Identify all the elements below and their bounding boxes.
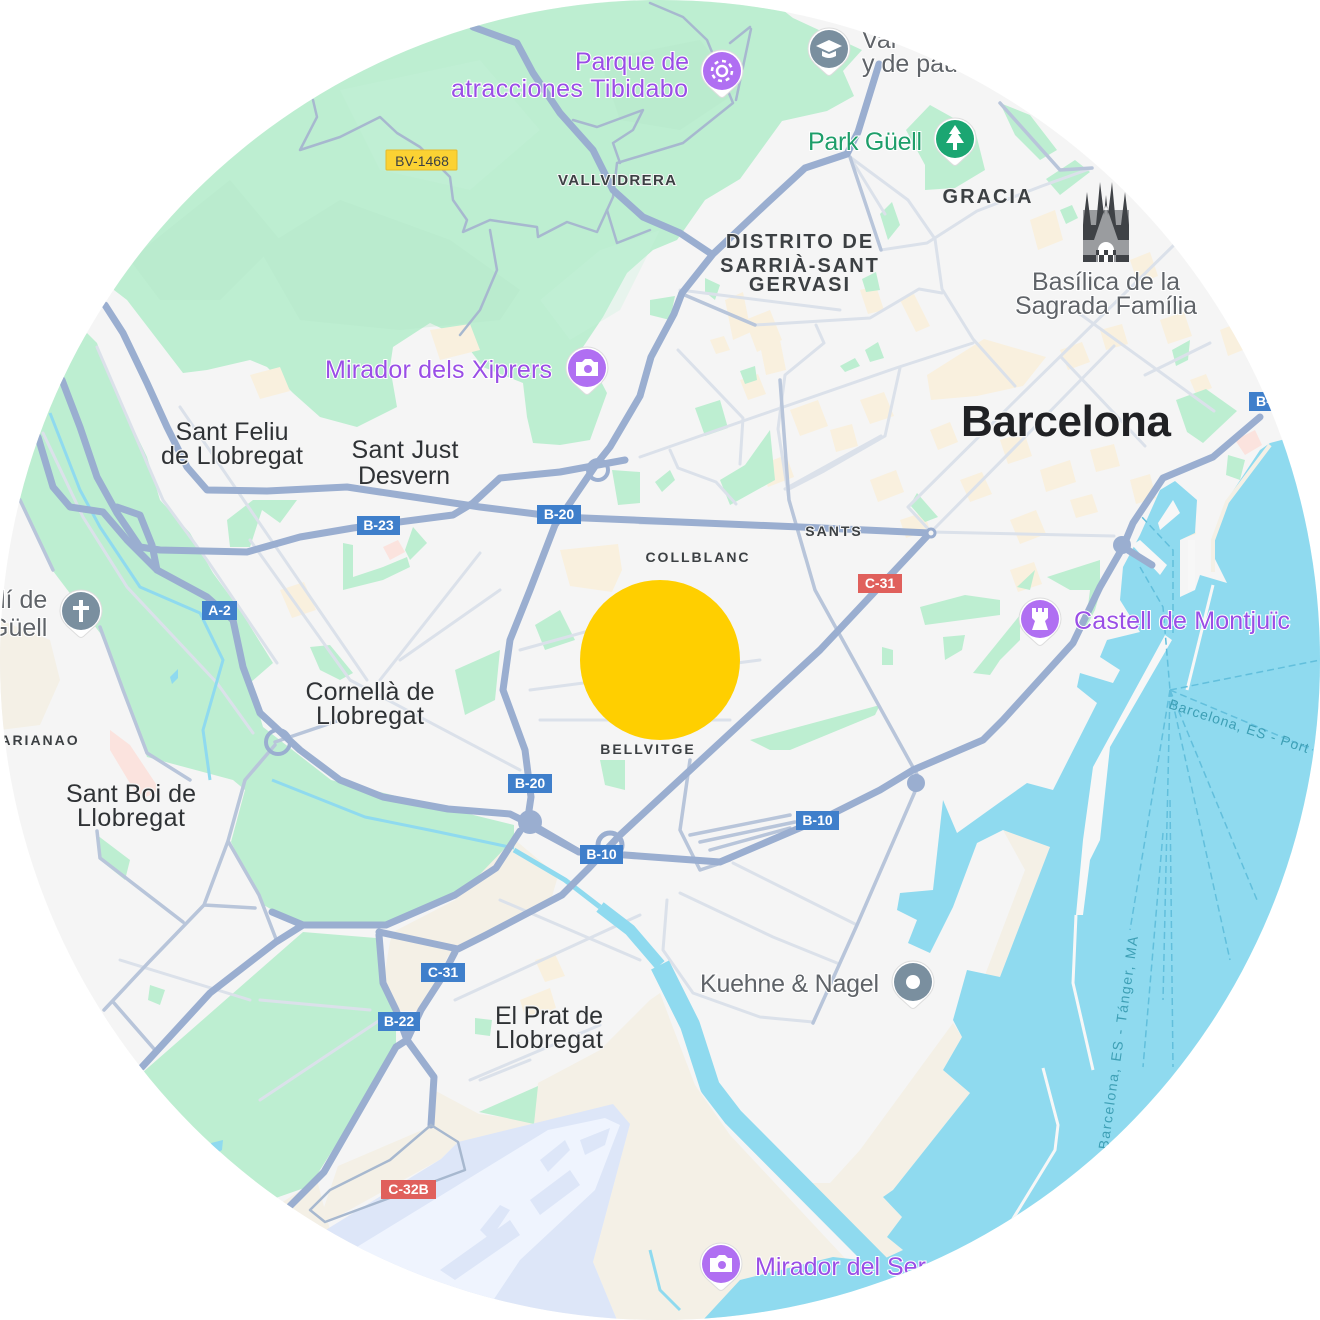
icon: Tibidabo pin	[701, 50, 743, 98]
text: district labels: BELLVITGE	[600, 741, 696, 757]
text: city labels: Sant Feliu	[176, 418, 288, 446]
text: city labels: Val	[862, 26, 896, 54]
icon: cross pin	[60, 590, 102, 638]
text: city labels: Kuehne & Nagel	[700, 970, 879, 998]
tan land areas	[0, 620, 1050, 1320]
icon: Castell de Montjuïc pin	[1019, 598, 1061, 646]
text: city labels: Barcelona	[961, 397, 1172, 446]
text: district labels: GERVASI	[749, 274, 851, 296]
text: district labels: COLLBLANC	[645, 549, 751, 565]
road shields: blue: B-20	[515, 775, 545, 791]
text: city labels: Llobregat	[77, 804, 185, 832]
icon: Kuehne & Nagel pin	[892, 961, 934, 1008]
text: points of interest: Park Güell	[808, 128, 922, 156]
text: district labels: ARIANAO	[0, 732, 80, 748]
sea	[703, 430, 1320, 1320]
Llobregat river and streams	[50, 413, 880, 1310]
text: city labels: de Llobregat	[161, 442, 303, 470]
text: sea route labels: Barcelona, ES - Tánger, MA	[1095, 935, 1141, 1150]
mountain local roads	[300, 3, 751, 335]
text: city labels: Sant Boi de	[66, 780, 196, 808]
road shields: blue: B-10	[586, 846, 617, 862]
text: city labels: Llobregat	[495, 1026, 603, 1054]
text: city labels: y de pau	[862, 50, 958, 78]
text: city labels: lí de	[0, 586, 47, 614]
harbour quays and ponds	[170, 445, 1270, 1240]
shipping lanes	[1130, 515, 1320, 1067]
text: points of interest: Parque de	[575, 48, 689, 76]
text: city labels: Llobregat	[316, 702, 424, 730]
text: points of interest	[325, 48, 1290, 1281]
green triangle by airport	[479, 1086, 538, 1124]
location marker: yellow circle	[580, 580, 740, 740]
road shields: red	[381, 574, 902, 1199]
road shields: blue: B-22	[384, 1013, 414, 1029]
road shields: red: C-31	[865, 575, 895, 591]
road shields: blue: C-31	[428, 964, 458, 980]
text: city labels: Sant Just	[352, 436, 459, 464]
road shields: blue: B-10	[802, 812, 833, 828]
minor streets	[43, 157, 1214, 1100]
text: city labels: El Prat de	[495, 1002, 603, 1030]
text: sea route labels: Barcelona, ES - Port	[1167, 696, 1311, 756]
small parks	[97, 202, 1245, 1036]
text: sea route labels	[1095, 696, 1311, 1150]
text: district labels: VALLVIDRERA	[558, 172, 678, 189]
mountain greenery: Collserola	[0, 0, 1090, 445]
road shield: BV-1468	[386, 150, 457, 170]
city tan blotches	[110, 210, 1262, 1020]
road shields: blue	[202, 392, 1273, 1031]
airport	[324, 1104, 630, 1320]
icon: Mirador dels Xiprers pin	[566, 347, 608, 394]
text: points of interest: Mirador dels Xiprers	[325, 356, 552, 384]
road shield: BV-1468: BV-1468	[395, 153, 449, 169]
text: points of interest: Castell de Montjuïc	[1074, 607, 1290, 635]
icon: Sagrada Família	[1083, 182, 1129, 262]
road shields: blue: B-23	[363, 517, 394, 533]
icon: Park Güell pin	[934, 118, 976, 166]
text: city labels: Cornellà de	[306, 678, 434, 706]
text: city labels: Basílica de la	[1032, 268, 1180, 296]
road shields: red: C-32B	[388, 1181, 429, 1197]
text: city labels	[0, 26, 1197, 1054]
road shields: blue: B-	[1256, 393, 1271, 409]
Llobregat delta greenery	[0, 333, 514, 1200]
road shields: blue: B-20	[544, 506, 574, 522]
secondary roads	[20, 103, 1092, 1050]
text: city labels: Desvern	[358, 462, 450, 490]
text: district labels	[0, 172, 1033, 757]
text: district labels: GRACIA	[943, 186, 1033, 208]
text: city labels: Sagrada Família	[1015, 292, 1197, 320]
text: points of interest: atracciones Tibidabo	[451, 75, 688, 103]
icon: Mirador del Ser pin	[700, 1243, 742, 1290]
text: district labels: SARRIÀ-SANT	[720, 254, 880, 277]
icon: university pin	[808, 28, 850, 76]
road shields: blue: A-2	[208, 602, 231, 618]
text: district labels: SANTS	[805, 523, 863, 539]
text: district labels: DISTRITO DE	[726, 231, 874, 253]
text: points of interest: Mirador del Ser	[755, 1253, 926, 1281]
